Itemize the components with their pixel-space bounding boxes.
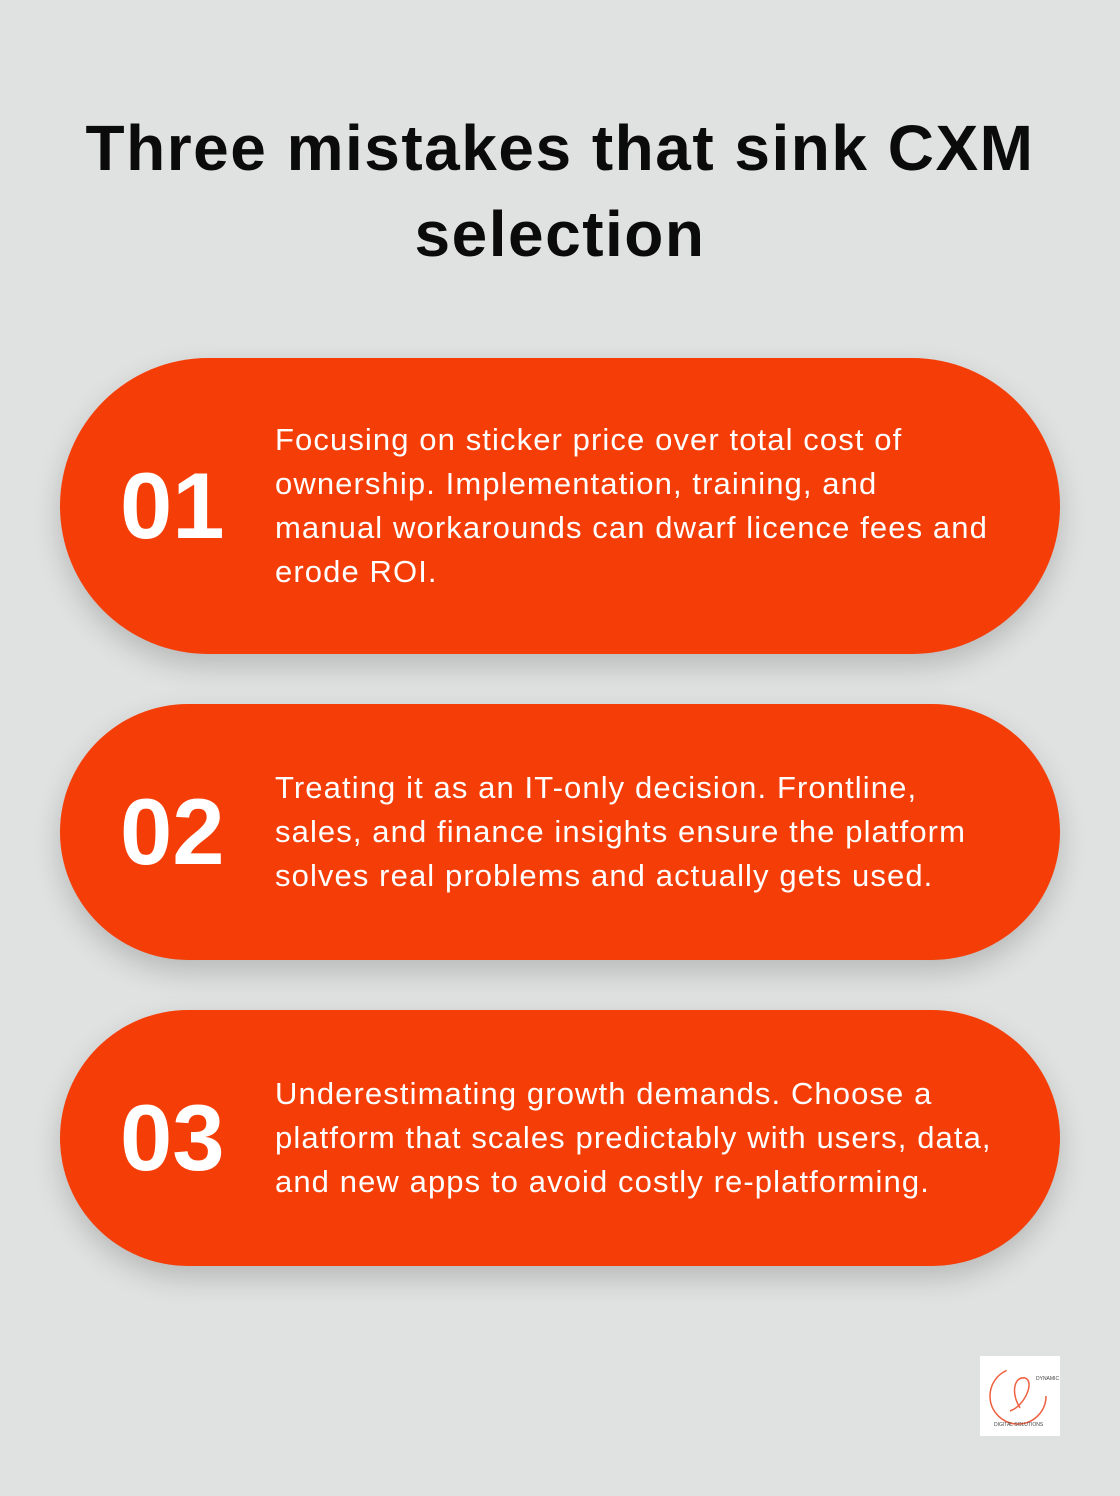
text 03: Underestimating growth demands. Choose a xyxy=(275,1076,932,1111)
title: Three mistakes that sink CXM xyxy=(86,112,1034,184)
icon: logo: DIGITAL SOLUTIONS xyxy=(994,1422,1044,1428)
text 01: ownership. Implementation, training, and xyxy=(275,466,877,501)
text 02: sales, and finance insights ensure the platform xyxy=(275,814,966,849)
title: selection xyxy=(415,198,705,270)
panel: mistake 01 xyxy=(60,358,1060,654)
panel: mistake 03 xyxy=(60,1010,1060,1266)
text 01: Focusing on sticker price over total cost of xyxy=(275,422,902,457)
text 02: solves real problems and actually gets used. xyxy=(275,858,933,893)
text 03: platform that scales predictably with users, data, xyxy=(275,1120,992,1155)
title xyxy=(86,112,1034,270)
text 02 xyxy=(275,770,966,893)
icon: logo: DYNAMIC xyxy=(1036,1376,1059,1382)
text 02: Treating it as an IT-only decision. Frontline, xyxy=(275,770,917,805)
text 01 xyxy=(275,422,988,589)
number 01: 01 xyxy=(120,453,225,558)
text 01: erode ROI. xyxy=(275,554,438,589)
text 01: manual workarounds can dwarf licence fees and xyxy=(275,510,988,545)
number 02: 02 xyxy=(120,779,225,884)
icon: logo xyxy=(980,1356,1060,1436)
panel: mistake 02 xyxy=(60,704,1060,960)
text 03 xyxy=(275,1076,992,1199)
text 03: and new apps to avoid costly re-platforming. xyxy=(275,1164,930,1199)
number 03: 03 xyxy=(120,1085,225,1190)
